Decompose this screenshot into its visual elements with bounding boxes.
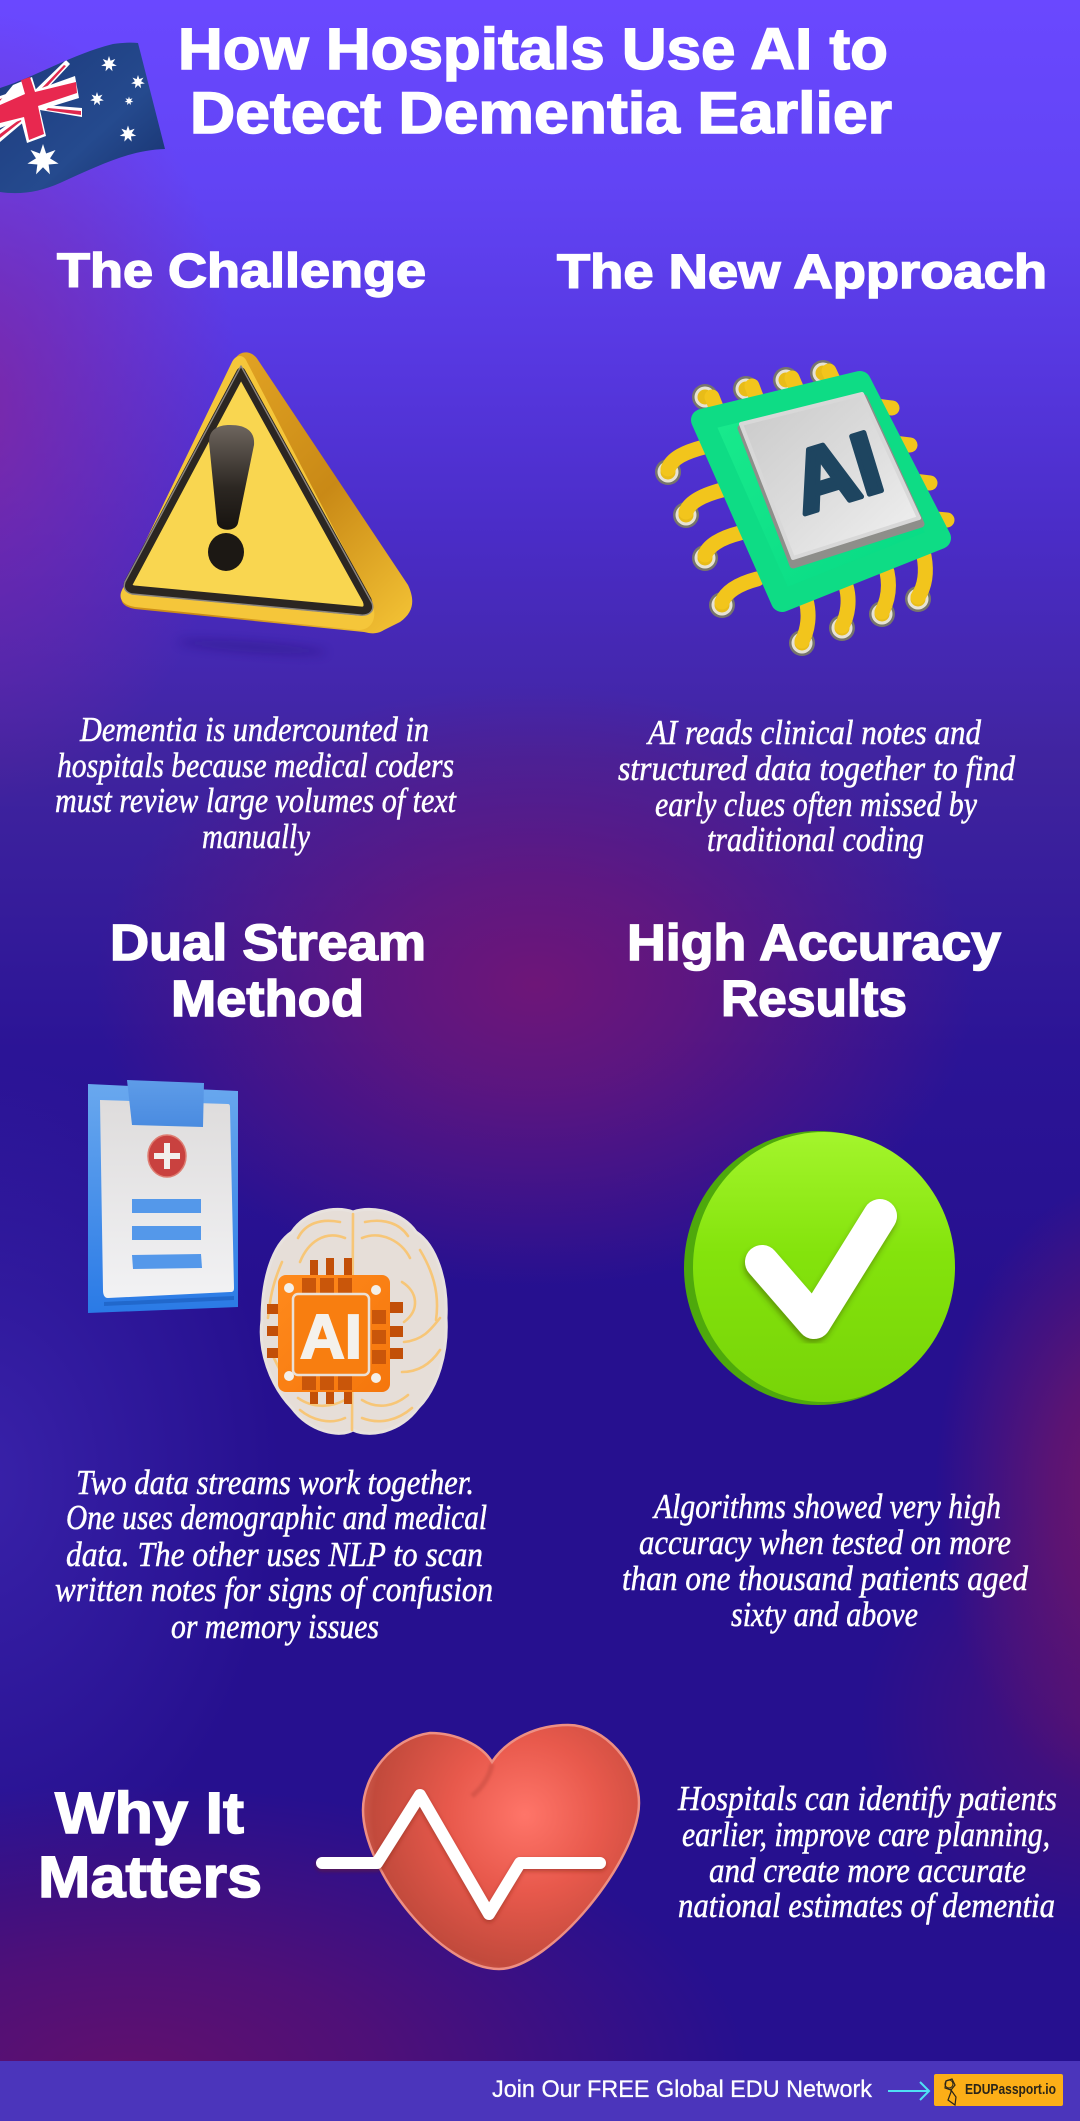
description: the challenge: Dementia is undercounted in: [79, 710, 429, 749]
icon: brain with AI chip: AI: [300, 1303, 362, 1372]
description: high accuracy results: [622, 1487, 1028, 1634]
description: the challenge: must review large volumes of text: [55, 781, 457, 820]
panel: why it matters: [38, 1725, 1057, 1969]
description: dual stream method: or memory issues: [171, 1607, 379, 1646]
icon: warning triangle: [121, 352, 412, 657]
description: the challenge: hospitals because medical coders: [57, 746, 454, 785]
arrow: [888, 2082, 929, 2100]
heading: dual stream method: Dual Stream: [110, 914, 426, 971]
description: high accuracy results: Algorithms showed very high: [652, 1487, 1001, 1526]
description: dual stream method: One uses demographic and medical: [66, 1498, 487, 1537]
heading: why it matters: Why It: [55, 1781, 244, 1846]
panel: high accuracy results: [622, 914, 1028, 1634]
description: the new approach: structured data together to find: [618, 749, 1015, 788]
heading: why it matters: [38, 1781, 262, 1910]
heading: dual stream method: Method: [171, 970, 364, 1027]
description: the new approach: early clues often missed by: [655, 785, 977, 824]
icon: heart with pulse line: [322, 1725, 639, 1969]
heading: high accuracy results: Results: [721, 970, 907, 1027]
description: dual stream method: written notes for signs of confusion: [55, 1570, 493, 1609]
description: dual stream method: [55, 1463, 493, 1646]
title: Detect Dementia Earlier: [190, 81, 892, 146]
heading: high accuracy results: [627, 914, 1002, 1027]
title: How Hospitals Use AI to: [178, 17, 888, 82]
description: dual stream method: Two data streams work together.: [76, 1463, 474, 1502]
panel: the challenge: [55, 245, 457, 856]
description: the new approach: traditional coding: [707, 820, 924, 859]
icon: medical clipboard: [88, 1080, 238, 1313]
panel: dual stream method: [55, 914, 493, 1646]
logo: EDUPassport.io badge: EDUPassport.io: [965, 2082, 1056, 2098]
heading: the challenge: The Challenge: [57, 245, 426, 298]
heading: why it matters: Matters: [38, 1845, 262, 1910]
heading: the new approach: The New Approach: [557, 246, 1047, 299]
icon: AI chip: [655, 360, 947, 656]
icon: green check mark: [684, 1131, 955, 1405]
footer bar: [0, 2061, 1080, 2121]
description: why it matters: [677, 1779, 1057, 1925]
description: the challenge: manually: [202, 817, 310, 856]
heading: dual stream method: [110, 914, 426, 1027]
icon: AI chip: AI: [780, 412, 893, 533]
logo: EDUPassport.io badge: [934, 2074, 1063, 2106]
description: the challenge: [55, 710, 457, 856]
panel: the new approach: [557, 246, 1047, 859]
footer call to action: Join Our FREE Global EDU Network: [492, 2076, 873, 2103]
description: the new approach: AI reads clinical notes and: [646, 713, 981, 752]
description: high accuracy results: accuracy when tested on more: [639, 1523, 1011, 1562]
icon: brain with AI chip: [261, 1209, 446, 1433]
description: high accuracy results: than one thousand patients aged: [622, 1559, 1028, 1598]
description: why it matters: and create more accurate: [709, 1851, 1026, 1890]
title: [178, 17, 892, 146]
heading: high accuracy results: High Accuracy: [627, 914, 1002, 971]
description: the new approach: [618, 713, 1015, 859]
description: dual stream method: data. The other uses NLP to scan: [66, 1535, 483, 1574]
description: high accuracy results: sixty and above: [731, 1595, 918, 1634]
icon: Australian flag: [0, 43, 165, 193]
